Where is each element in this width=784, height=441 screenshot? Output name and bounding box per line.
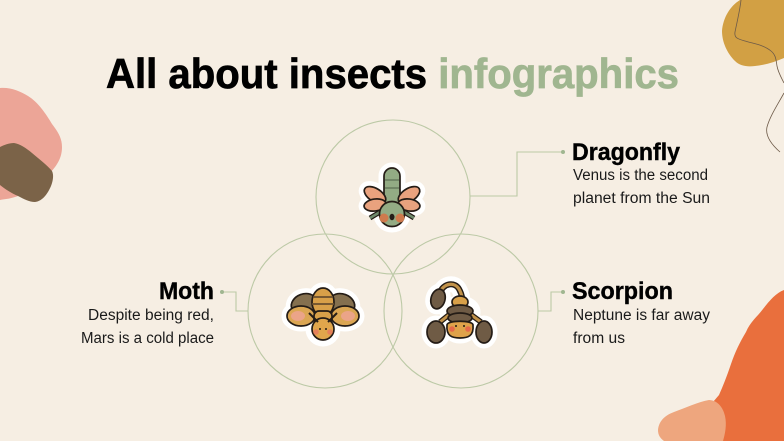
connector: scorpion [538, 290, 565, 311]
text block: dragonfly [572, 139, 710, 207]
connector: moth [220, 290, 248, 311]
text block: moth: Mars is a cold place [81, 330, 214, 347]
icon: dragonfly [361, 168, 423, 227]
icon: scorpion [427, 284, 492, 343]
text block: dragonfly: Venus is the second [573, 167, 708, 184]
blob: pink top left [0, 88, 62, 200]
text block: dragonfly: Dragonfly [572, 139, 681, 166]
text block: moth: Despite being red, [88, 307, 214, 324]
blob: orange bottom right [713, 290, 784, 441]
text block: scorpion: from us [573, 330, 625, 347]
squiggle line top right [735, 0, 784, 152]
icon: moth [287, 288, 359, 341]
text block: dragonfly: planet from the Sun [573, 190, 710, 207]
blob: peach bottom right [658, 400, 726, 441]
text block: moth: Moth [159, 278, 214, 305]
blob: gold top right [722, 0, 784, 66]
venn diagram circles [248, 120, 538, 388]
text block: moth [81, 278, 214, 347]
text block: scorpion: Neptune is far away [573, 307, 710, 324]
connector: dragonfly [470, 150, 565, 196]
text block: scorpion: Scorpion [572, 278, 673, 305]
blob: brown left [0, 143, 53, 202]
title: All about insects infographics [106, 50, 679, 97]
text block: scorpion [572, 278, 710, 347]
